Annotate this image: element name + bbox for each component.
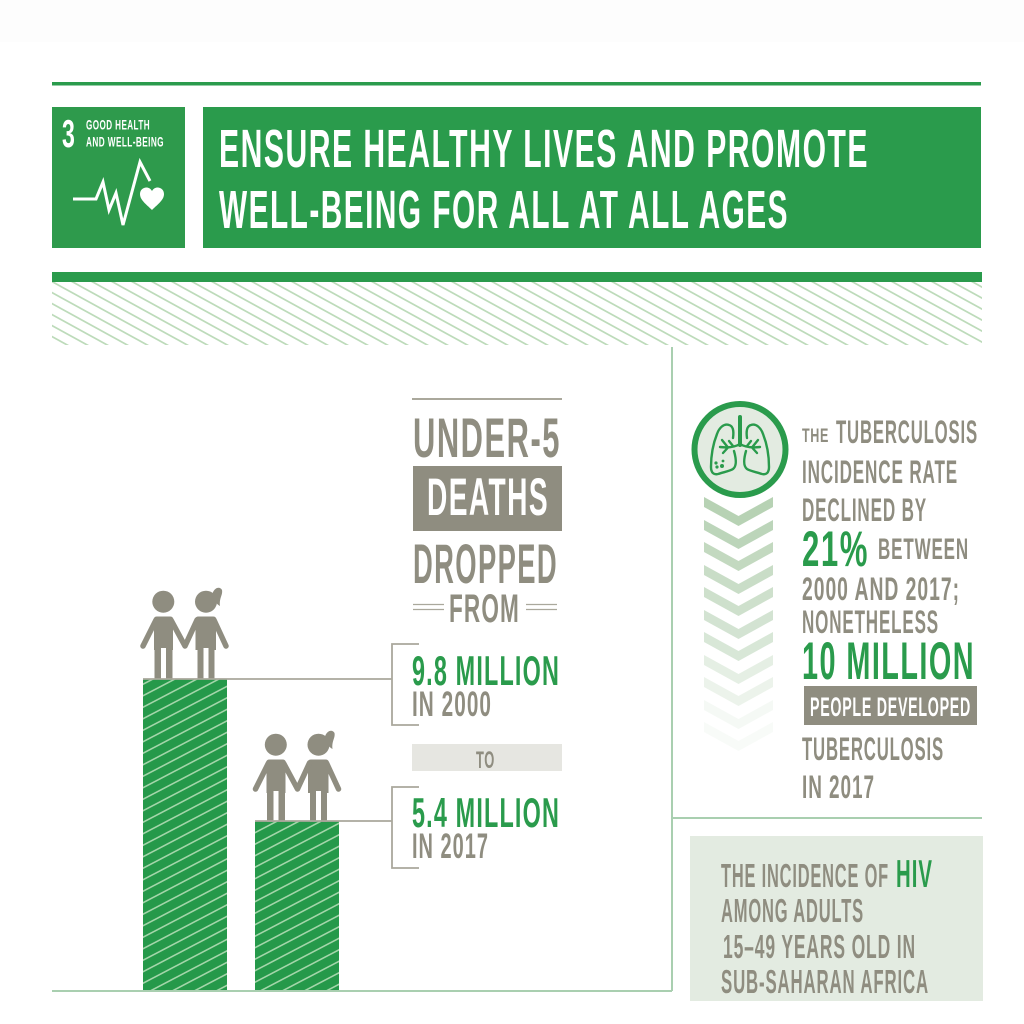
top rule <box>52 82 981 86</box>
deaths label <box>413 466 562 531</box>
bar: 2017 <box>255 821 339 990</box>
heading: under-5 deaths dropped from: FROM <box>449 587 520 631</box>
text block: tuberculosis <box>802 414 978 805</box>
to label <box>412 744 562 774</box>
hatched band <box>52 282 982 345</box>
connector: 2017 <box>255 787 419 868</box>
bar: 2000 <box>143 679 227 990</box>
text block: tuberculosis: 21% <box>802 521 869 577</box>
goal 3 badge <box>52 107 185 248</box>
stat: 2000 <box>412 647 560 724</box>
icon: children 2000 <box>143 588 226 679</box>
connector: 2000 <box>143 644 419 725</box>
thick rule <box>52 272 982 282</box>
goal number: 3 <box>62 113 76 156</box>
heading: under-5 deaths dropped from: DROPPED <box>413 532 558 595</box>
stat: 2017: 5.4 MILLION <box>412 789 560 836</box>
panel: HIV: HIV <box>896 853 933 896</box>
heading: under-5 deaths dropped from <box>412 398 562 631</box>
stat: 2000: IN 2000 <box>412 685 492 724</box>
heading: under-5 deaths dropped from: UNDER-5 <box>413 406 561 469</box>
title banner <box>203 107 981 248</box>
background top strip <box>0 0 1024 42</box>
panel: HIV <box>690 836 983 1001</box>
people developed label <box>804 686 977 725</box>
stat: 2000: 9.8 MILLION <box>412 647 560 694</box>
text block: tuberculosis: THE <box>802 426 829 447</box>
to label: TO <box>476 747 495 774</box>
stat: 2017 <box>412 789 560 866</box>
icon: heartbeat and heart <box>73 162 164 225</box>
chevrons: decline <box>704 497 773 751</box>
deaths label: DEATHS <box>427 468 549 527</box>
goal name <box>86 116 164 150</box>
panel dividers <box>52 347 982 992</box>
goal name: AND WELL-BEING <box>86 134 164 150</box>
panel: HIV: AMONG ADULTS <box>721 892 864 929</box>
goal name: GOOD HEALTH <box>86 116 150 132</box>
text block: tuberculosis: IN 2017 <box>802 769 875 805</box>
stat: 2017: IN 2017 <box>412 827 489 866</box>
icon: children 2017 <box>256 731 338 822</box>
bar chart: under-5 deaths <box>143 588 419 990</box>
icon: lungs <box>694 404 786 495</box>
